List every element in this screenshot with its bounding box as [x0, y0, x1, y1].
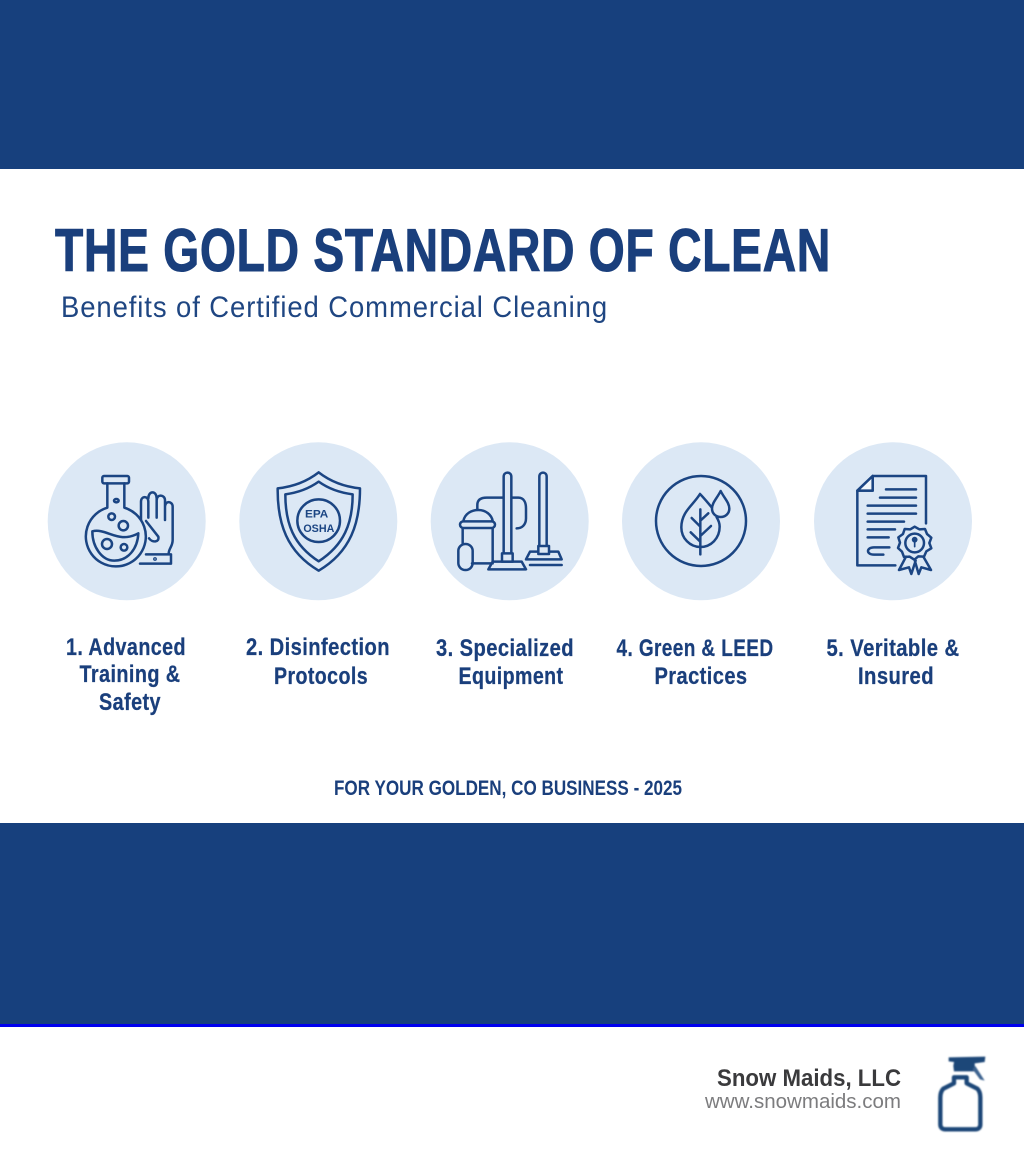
panel: advanced training and safety	[48, 442, 206, 716]
bottom navy band	[0, 823, 1024, 1024]
panel: green and LEED practices	[616, 442, 780, 690]
icon circle 4	[622, 442, 780, 600]
label 4 line 2: Practices	[654, 663, 748, 690]
icon: vacuum and mops	[458, 473, 562, 570]
top navy band	[0, 0, 1024, 169]
label 2 line 2: Protocols	[274, 663, 368, 690]
label 1: 1. Advanced	[66, 634, 186, 661]
icon: shield	[278, 472, 360, 571]
icon circle 1	[48, 442, 206, 600]
company name: Snow Maids, LLC	[717, 1065, 901, 1092]
icon: spray bottle	[940, 1057, 985, 1129]
label 3 line 2: Equipment	[458, 663, 564, 690]
website: www.snowmaids.com	[704, 1091, 901, 1113]
tagline: FOR YOUR GOLDEN, CO BUSINESS - 2025	[334, 777, 682, 800]
subtitle: Benefits of Certified Commercial Cleaning	[61, 291, 608, 324]
label 1 line 3: Safety	[99, 689, 161, 716]
label 2: 2. Disinfection	[246, 634, 390, 661]
panel: veritable and insured	[814, 442, 972, 690]
icon circle 3	[431, 442, 589, 600]
icon: certificate with rosette	[857, 476, 931, 574]
icon circle 5	[814, 442, 972, 600]
label 1 line 2: Training &	[80, 661, 180, 688]
panel: specialized equipment	[431, 442, 589, 690]
label 5 line 2: Insured	[858, 663, 934, 690]
label 5: 5. Veritable &	[826, 635, 960, 662]
blue rule	[0, 1024, 1024, 1027]
icon: shield: EPA	[305, 508, 328, 520]
icon: flask and glove	[86, 476, 173, 566]
label 4: 4. Green & LEED	[616, 635, 774, 662]
panel: disinfection protocols	[239, 442, 397, 690]
icon circle 2	[239, 442, 397, 600]
icon: leaf and drop in ring	[656, 476, 746, 566]
icon: shield: OSHA	[303, 523, 334, 535]
label 3: 3. Specialized	[436, 635, 574, 662]
